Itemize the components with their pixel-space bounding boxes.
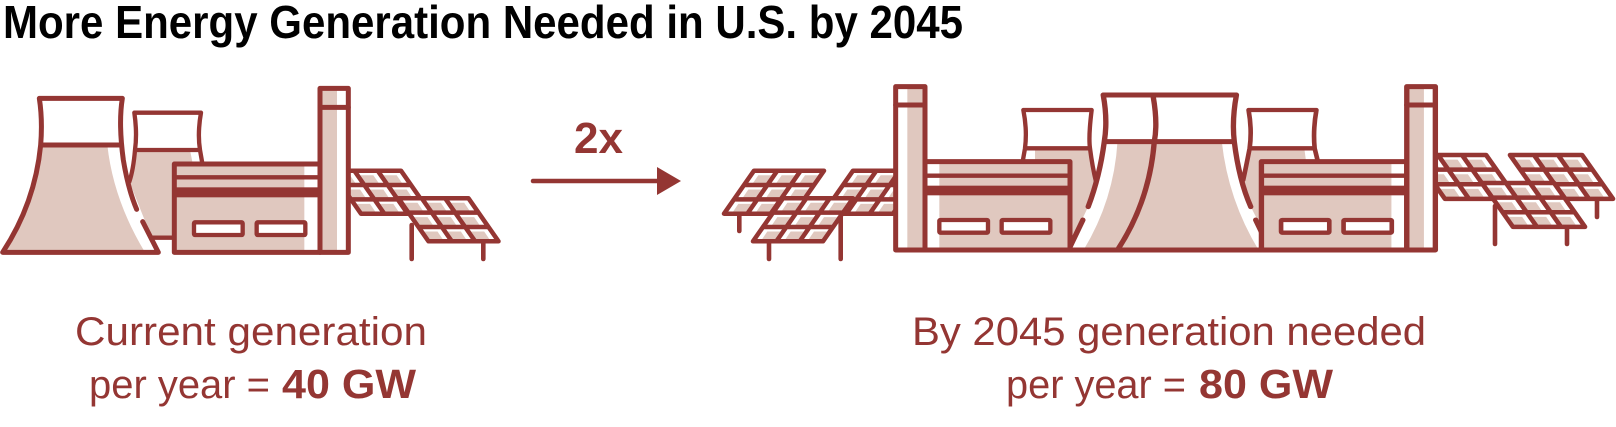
left factory building [925, 162, 1070, 250]
windows [939, 220, 1050, 233]
right factory building [1261, 162, 1407, 250]
solar panels: current plant [331, 171, 498, 259]
caption: current generation: Current generation [75, 310, 427, 354]
right rear cooling tower [1243, 110, 1317, 237]
right chimney [1407, 87, 1435, 250]
caption: 2045 generation needed: By 2045 generation needed [912, 310, 1426, 354]
front cooling tower [3, 98, 158, 252]
caption: current generation [75, 310, 427, 407]
solar panels: left of future plant [724, 171, 923, 259]
caption: 2045 generation needed: per year = [1006, 363, 1186, 407]
chimney [320, 88, 348, 252]
windows [194, 222, 305, 235]
arrow: doubling [533, 167, 681, 195]
left section: tower, building, chimney [1020, 110, 1097, 237]
caption: current generation: 40 GW [282, 361, 416, 407]
caption: 2045 generation needed [912, 310, 1426, 407]
left rear cooling tower [1020, 110, 1097, 237]
caption: 2045 generation needed: 80 GW [1199, 361, 1333, 407]
factory building [174, 164, 320, 252]
central cooling tower [1067, 95, 1273, 250]
left chimney [896, 87, 925, 250]
solar panels: right of future plant [1414, 155, 1613, 244]
plant structures: towers, building and chimney [3, 88, 348, 252]
windows [1281, 220, 1392, 233]
left factory and chimney [896, 87, 1070, 250]
multiplier label: 2x [574, 114, 624, 163]
right factory and chimney [1261, 87, 1435, 250]
caption: current generation: per year = [89, 363, 270, 407]
illustration: current power plant [3, 88, 499, 259]
illustration: future power plant [724, 87, 1613, 259]
back cooling tower [129, 113, 202, 240]
